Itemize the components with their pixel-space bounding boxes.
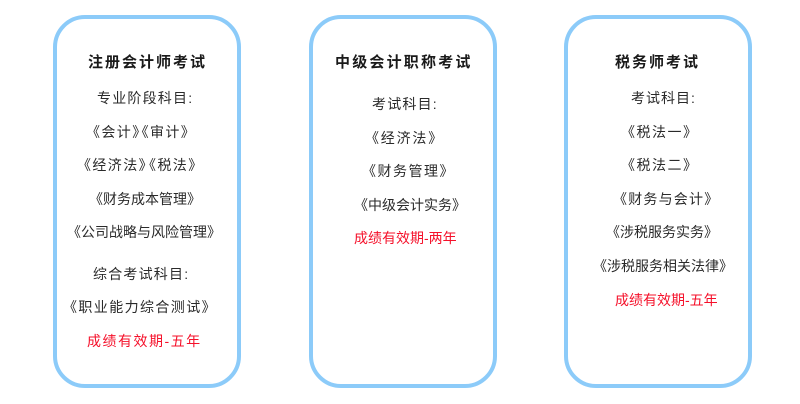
- text: 财务成本管理: 《财务成本管理》: [89, 191, 201, 207]
- text: 成绩有效期-五年: 成绩有效期-五年: [87, 333, 202, 349]
- text: 财务与会计: 《财务与会计》: [613, 191, 719, 207]
- text: 专业阶段科目: 专业阶段科目:: [97, 90, 193, 106]
- text: 涉税服务相关法律: 《涉税服务相关法律》: [593, 258, 733, 274]
- text: 中级会计实务: 《中级会计实务》: [354, 197, 466, 213]
- text: 公司战略与风险管理: 《公司战略与风险管理》: [67, 224, 221, 240]
- text: 税法二: 《税法二》: [621, 157, 698, 173]
- text: 经济法: 《经济法》: [365, 130, 444, 146]
- heading: 中级会计职称考试: 中级会计职称考试: [335, 54, 473, 71]
- text: 财务管理: 《财务管理》: [362, 163, 455, 179]
- panel: 中级会计职称考试: [309, 15, 497, 388]
- text: 职业能力综合测试: 《职业能力综合测试》: [63, 299, 217, 315]
- heading: 注册会计师考试: 注册会计师考试: [88, 54, 207, 71]
- panel: 注册会计师考试: [53, 15, 241, 388]
- heading: 税务师考试: 税务师考试: [615, 54, 700, 71]
- text: 涉税服务实务: 《涉税服务实务》: [606, 224, 718, 240]
- text: 经济法 税法: 《经济法》《税法》: [77, 157, 204, 173]
- text: 考试科目: 考试科目:: [372, 96, 438, 112]
- text: 会计 审计: 《会计》《审计》: [86, 124, 196, 140]
- text: 成绩有效期-五年: 成绩有效期-五年: [615, 292, 718, 308]
- text: 税法一: 《税法一》: [621, 124, 698, 140]
- text: 综合考试科目: 综合考试科目:: [93, 266, 189, 282]
- panel: 税务师考试: [564, 15, 752, 388]
- text: 成绩有效期-两年: 成绩有效期-两年: [354, 230, 457, 246]
- text: 考试科目: 考试科目:: [631, 90, 696, 106]
